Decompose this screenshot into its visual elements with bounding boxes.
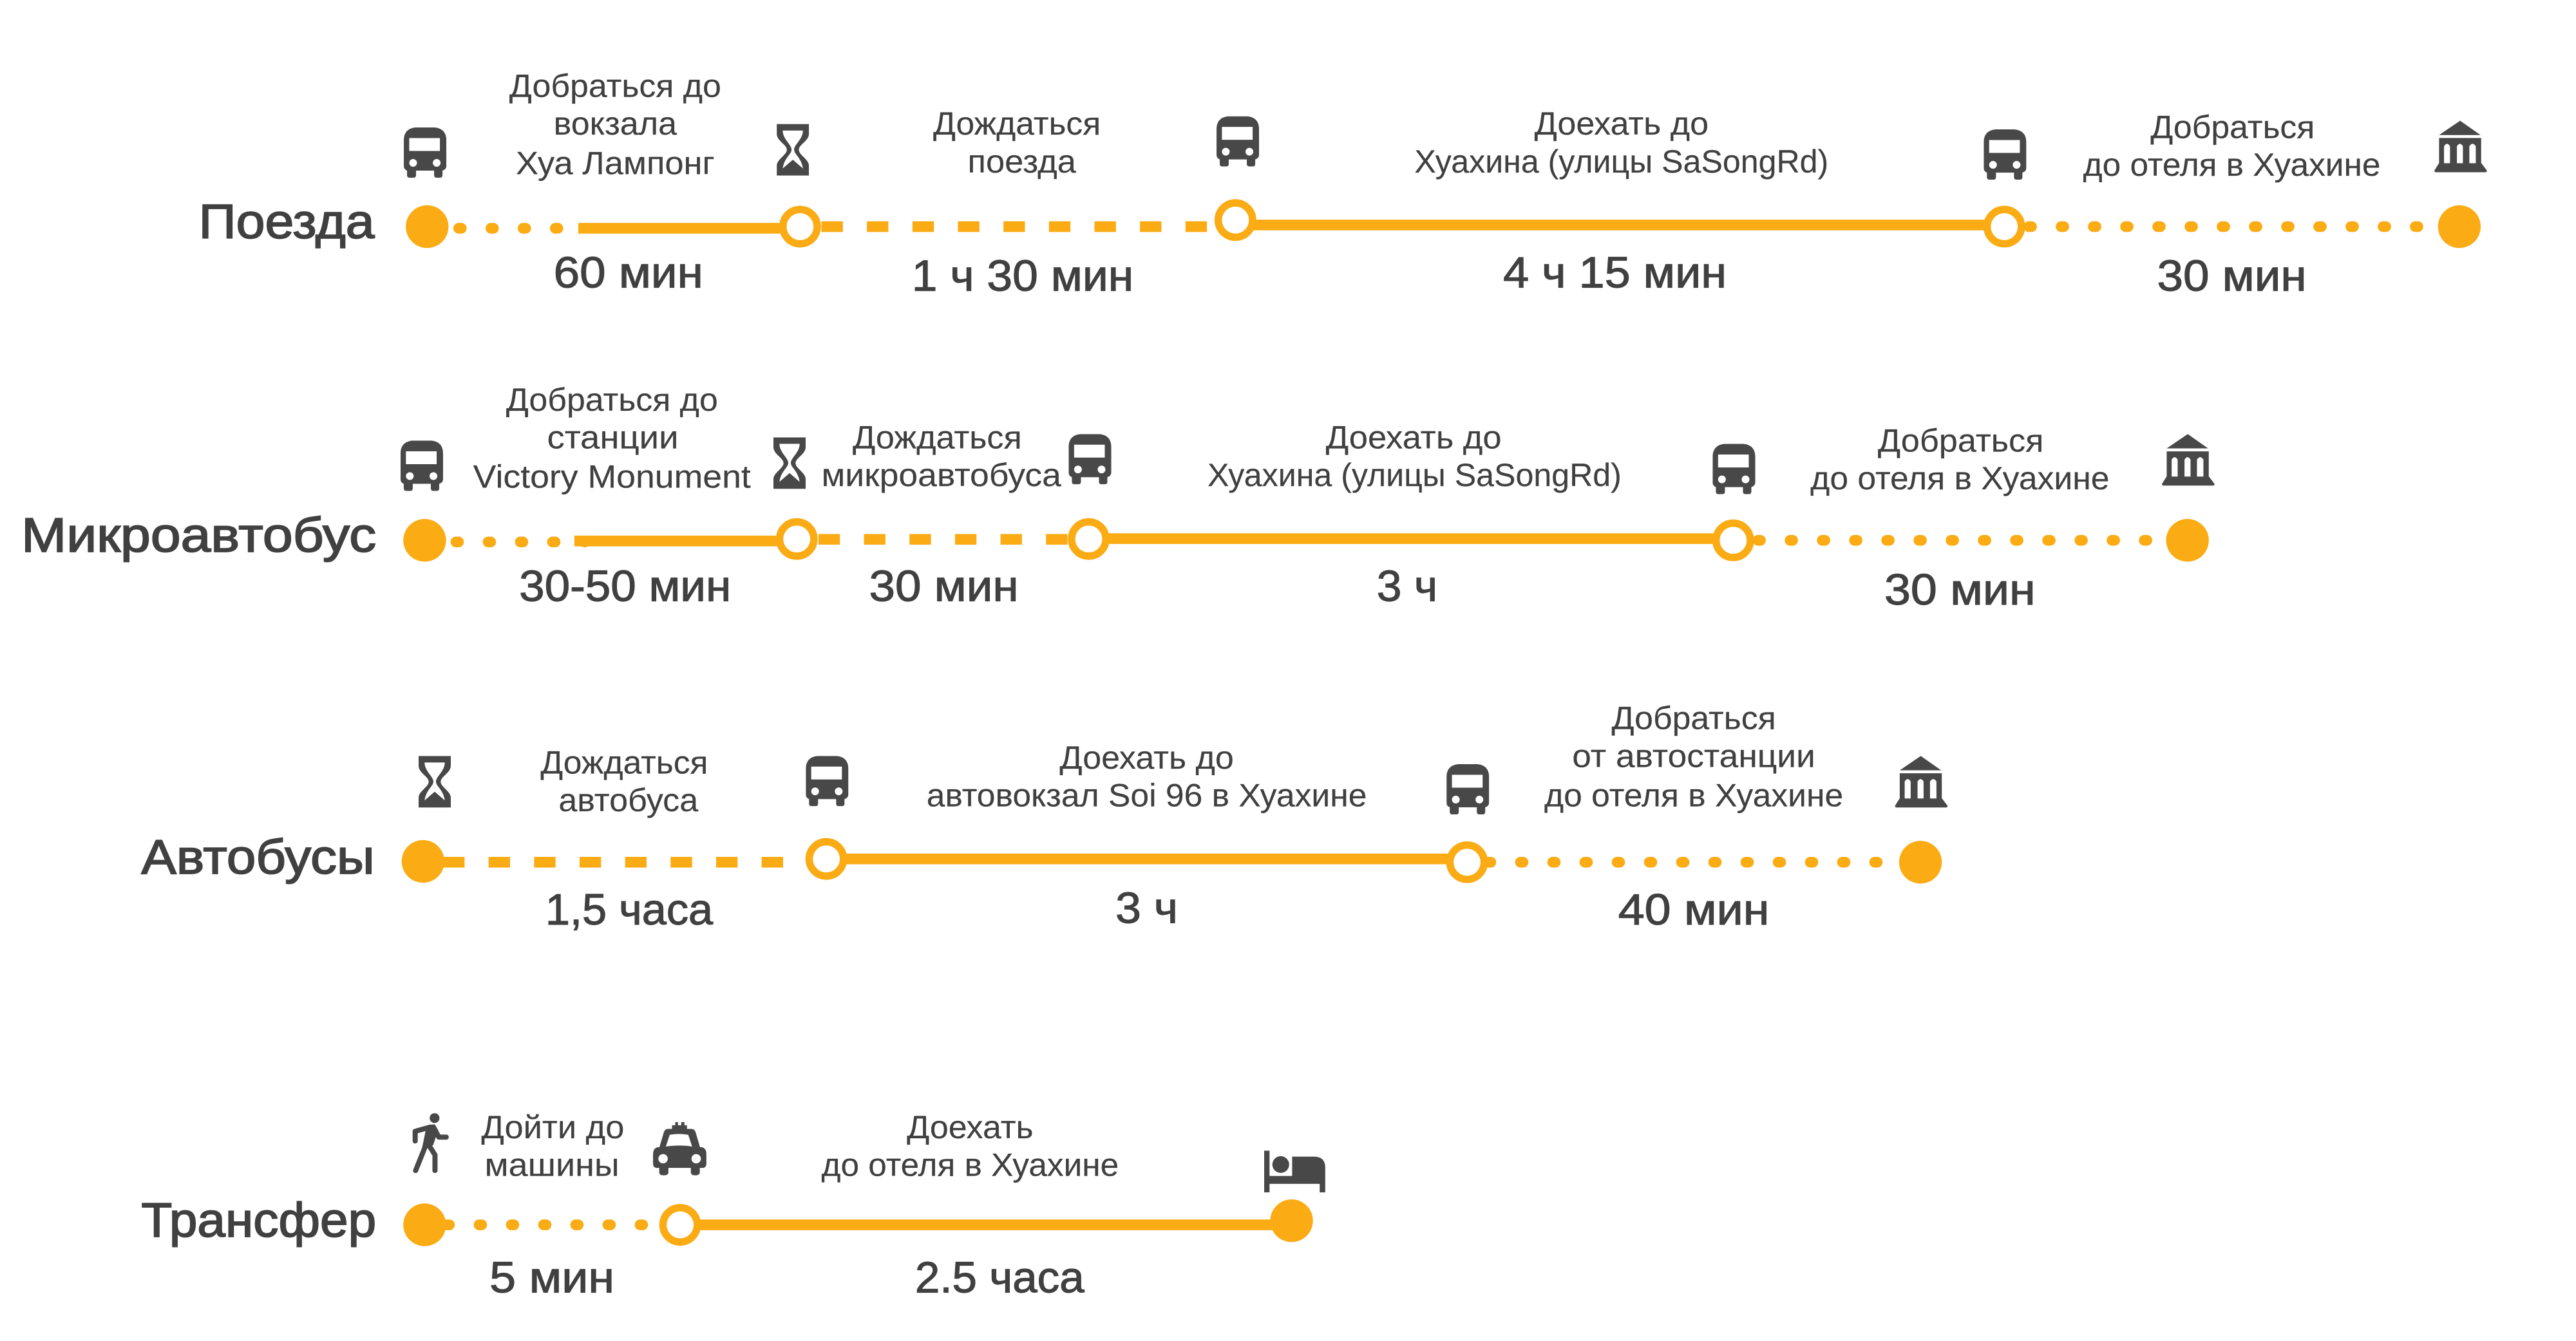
text: добраться до отеля — [1810, 423, 2109, 496]
route line: Микроавтобус — [403, 519, 2209, 561]
route line: Трансфер — [403, 1199, 1313, 1246]
heading: Автобусы: Автобусы — [141, 830, 375, 884]
icon: hourglass — [419, 756, 451, 807]
route row: Автобусы — [141, 700, 1947, 934]
text: добраться до вокзала: Хуа Лампонг — [516, 145, 715, 181]
text: доехать до Хуахина: Доехать до — [1535, 106, 1709, 142]
text: дойти до машины — [481, 1109, 624, 1183]
route row: Поезда — [199, 68, 2487, 301]
icon: bus — [404, 127, 446, 178]
route line: Поезда — [406, 203, 2481, 248]
text: добраться до отеля: до отеля в Хуахине — [1810, 460, 2109, 496]
text: добраться до станции: Добраться до — [506, 382, 718, 418]
text: дождаться автобуса — [540, 745, 708, 818]
icon: walking person — [415, 1113, 446, 1170]
text: доехать до Хуахина — [1414, 106, 1828, 180]
text: добраться до станции: станции — [547, 419, 679, 455]
text: дождаться микроавтобуса: Дождаться — [853, 419, 1022, 455]
icon: museum — [1895, 756, 1947, 807]
duration: 1,5 часа: 1,5 часа — [545, 886, 713, 934]
duration: 4 ч 15 мин: 4 ч 15 мин — [1503, 249, 1727, 297]
text: доехать до автовокзала — [927, 740, 1367, 814]
icon: bus — [401, 440, 443, 491]
text: добраться до отеля: до отеля в Хуахине — [2083, 147, 2380, 183]
text: добраться от автостанции: до отеля в Хуахине — [1544, 778, 1843, 814]
text: добраться от автостанции: от автостанции — [1572, 738, 1815, 774]
text: добраться до вокзала: вокзала — [554, 106, 677, 142]
route line: Автобусы — [402, 840, 1942, 883]
icon: hourglass — [773, 437, 806, 489]
duration: 3 ч: 3 ч — [1115, 885, 1178, 933]
text: доехать до Хуахина: Доехать до — [1326, 419, 1502, 455]
icon: bus — [1984, 129, 2026, 180]
text: добраться до отеля — [2083, 109, 2380, 183]
text: доехать до отеля: до отеля в Хуахине — [821, 1147, 1119, 1183]
text: дождаться автобуса: автобуса — [558, 782, 698, 818]
duration: 2.5 часа: 2.5 часа — [915, 1254, 1084, 1302]
icon: bed — [1264, 1150, 1325, 1192]
heading: Поезда: Поезда — [199, 194, 375, 249]
icon: hourglass — [777, 124, 809, 176]
text: доехать до Хуахина: Хуахина (улицы SaSongRd) — [1208, 457, 1622, 493]
text: добраться до отеля: Добраться — [2150, 109, 2315, 145]
icon: bus — [1217, 117, 1259, 167]
icon: bus — [806, 756, 848, 806]
text: доехать до отеля: Доехать — [907, 1109, 1034, 1145]
text: дождаться микроавтобуса: микроавтобуса — [821, 457, 1061, 493]
icon: bus — [1446, 764, 1489, 814]
duration: 5 мин: 5 мин — [489, 1254, 614, 1302]
icon: taxi — [653, 1122, 706, 1176]
duration: 30 мин: 30 мин — [1884, 566, 2036, 614]
text: доехать до автовокзала: автовокзал Soi 96 в Хуахине — [927, 778, 1367, 814]
text: доехать до Хуахина: Хуахина (улицы SaSongRd) — [1414, 144, 1828, 180]
heading: Микроавтобус: Микроавтобус — [21, 508, 376, 562]
text: дождаться поезда: поезда — [968, 144, 1076, 180]
duration: 1 ч 30 мин: 1 ч 30 мин — [912, 252, 1133, 301]
text: добраться до станции — [473, 382, 751, 495]
text: дойти до машины: машины — [485, 1147, 620, 1183]
duration: 30-50 мин: 30-50 мин — [519, 563, 731, 611]
text: добраться до вокзала: Добраться до — [509, 68, 721, 104]
duration: 40 мин: 40 мин — [1618, 886, 1769, 934]
text: добраться от автостанции: Добраться — [1612, 700, 1776, 736]
icon: bus — [1068, 434, 1111, 484]
text: дождаться поезда: Дождаться — [933, 106, 1101, 142]
text: добраться от автостанции — [1544, 700, 1843, 814]
route row: Микроавтобус — [21, 382, 2215, 614]
text: добраться до отеля: Добраться — [1878, 423, 2043, 459]
text: дождаться автобуса: Дождаться — [540, 745, 708, 781]
route row: Трансфер — [141, 1109, 1325, 1302]
text: доехать до автовокзала: Доехать до — [1059, 740, 1234, 776]
duration: 30 мин: 30 мин — [2157, 252, 2307, 301]
text: дождаться поезда — [933, 106, 1101, 180]
icon: museum — [2434, 120, 2487, 173]
icon: bus — [1712, 444, 1755, 494]
text: дойти до машины: Дойти до — [481, 1109, 624, 1145]
text: дождаться микроавтобуса — [822, 419, 1061, 493]
duration: 3 ч: 3 ч — [1377, 563, 1437, 611]
heading: Трансфер: Трансфер — [141, 1193, 376, 1247]
text: добраться до вокзала — [509, 68, 721, 181]
text: доехать до отеля — [822, 1109, 1119, 1183]
duration: 60 мин: 60 мин — [554, 249, 703, 297]
icon: museum — [2162, 434, 2215, 485]
text: доехать до Хуахина — [1208, 419, 1622, 493]
text: добраться до станции: Victory Monument — [473, 459, 751, 495]
duration: 30 мин: 30 мин — [869, 563, 1019, 611]
